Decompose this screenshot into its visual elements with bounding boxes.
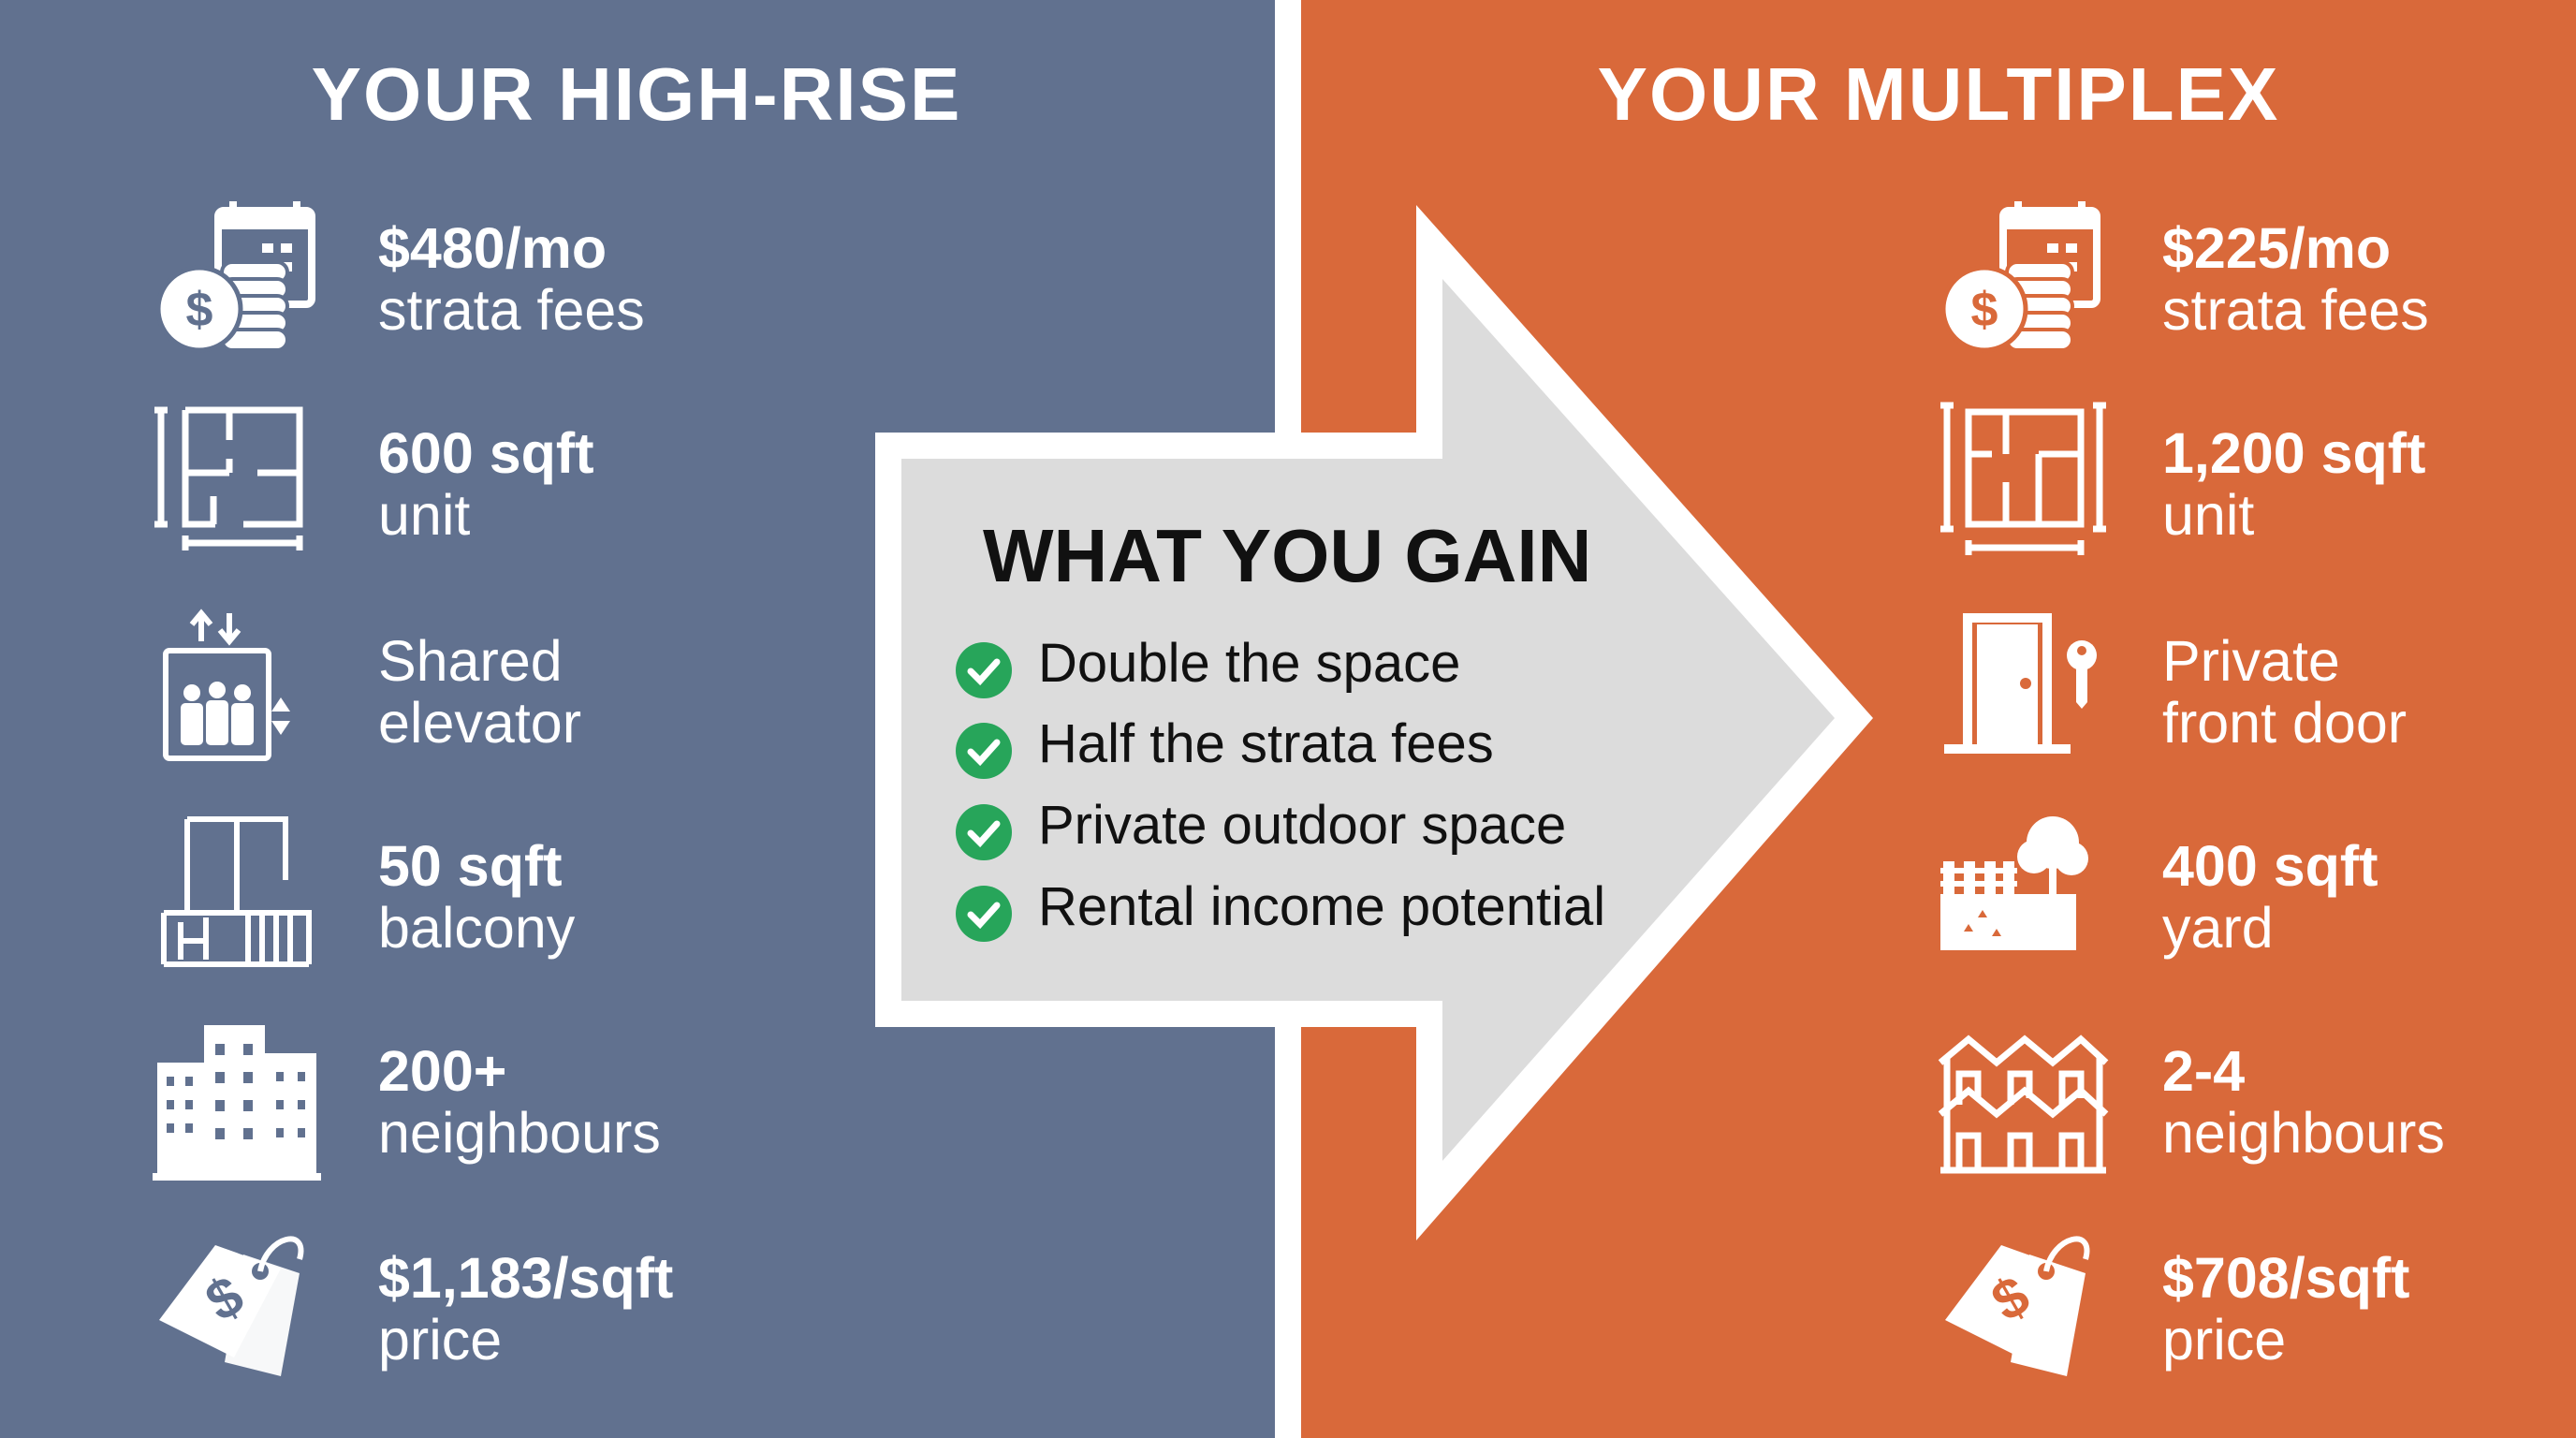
text: balcony: [378, 834, 575, 960]
checklist: Half the strata fees: [1038, 713, 1494, 774]
icon: row houses: [1938, 1034, 2108, 1174]
text: balcony: 50 sqft: [378, 834, 563, 898]
title: your multiplex: YOUR MULTIPLEX: [1598, 52, 2279, 136]
gain panel content: [956, 514, 1605, 942]
text: unit size: unit: [2162, 483, 2254, 547]
checklist: Double the space: [1038, 633, 1460, 694]
checklist: Private outdoor space: [1038, 795, 1566, 856]
icon: strata fees calendar coins: [1945, 201, 2100, 348]
text: balcony: balcony: [378, 896, 575, 960]
text: strata fees: strata fees: [378, 278, 645, 342]
icon: strata fees calendar coins: $: [1971, 283, 1998, 337]
text: price per sqft: $1,183/sqft: [378, 1246, 673, 1310]
checklist: [956, 633, 1605, 942]
text: neighbours: neighbours: [2162, 1101, 2445, 1165]
icon: yard: [1940, 816, 2088, 950]
text: neighbours: neighbours: [378, 1101, 661, 1165]
text: strata fees: $480/mo: [378, 216, 607, 280]
text: price per sqft: $708/sqft: [2162, 1246, 2409, 1310]
icon: price tag: $: [1981, 1264, 2040, 1333]
checklist: Rental income potential: [1038, 876, 1605, 937]
title: your high-rise: YOUR HIGH-RISE: [312, 52, 961, 136]
text: strata fees: [2162, 216, 2429, 342]
text: price per sqft: [378, 1246, 673, 1372]
icon: price tag: $: [195, 1264, 254, 1333]
text: unit size: [378, 421, 594, 547]
text: strata fees: $225/mo: [2162, 216, 2391, 280]
text: shared elevator: [378, 629, 581, 755]
heading: what you gain: WHAT YOU GAIN: [983, 514, 1591, 597]
text: unit size: unit: [378, 483, 470, 547]
icon: towers: [153, 1025, 321, 1181]
text: yard: [2162, 834, 2378, 960]
text: unit size: 1,200 sqft: [2162, 421, 2425, 485]
item: half the strata fees: [956, 713, 1494, 779]
item: private outdoor space: [956, 795, 1566, 860]
text: shared elevator: elevator: [378, 691, 581, 755]
text: neighbours: 200+: [378, 1039, 506, 1103]
panel: multiplex background: [1301, 0, 2576, 1438]
icon: price tag: [159, 1236, 303, 1376]
icon: balcony: [161, 816, 312, 967]
text: yard: 400 sqft: [2162, 834, 2378, 898]
icon: strata fees calendar coins: $: [186, 283, 213, 337]
item: rental income potential: [956, 876, 1605, 942]
panel: high-rise background: [0, 0, 1275, 1438]
text: unit size: 600 sqft: [378, 421, 594, 485]
icon: private front door: [1944, 613, 2097, 754]
text: price per sqft: [2162, 1246, 2409, 1372]
text: neighbours: 2-4: [2162, 1039, 2245, 1103]
text: private front door: front door: [2162, 691, 2407, 755]
text: strata fees: strata fees: [2162, 278, 2429, 342]
text: yard: yard: [2162, 896, 2274, 960]
text: price per sqft: price: [2162, 1308, 2286, 1372]
text: neighbours: [378, 1039, 661, 1165]
icon: shared elevator: [163, 609, 290, 761]
icon: price tag: [1945, 1236, 2089, 1376]
text: unit size: [2162, 421, 2425, 547]
item: double the space: [956, 633, 1460, 698]
text: private front door: Private: [2162, 629, 2340, 693]
icon: floor plan: [154, 406, 303, 550]
text: strata fees: [378, 216, 645, 342]
text: shared elevator: Shared: [378, 629, 563, 693]
icon: floor plan: [1940, 403, 2106, 555]
text: neighbours: [2162, 1039, 2445, 1165]
icon: strata fees calendar coins: [161, 201, 315, 348]
text: price per sqft: price: [378, 1308, 502, 1372]
text: private front door: [2162, 629, 2407, 755]
